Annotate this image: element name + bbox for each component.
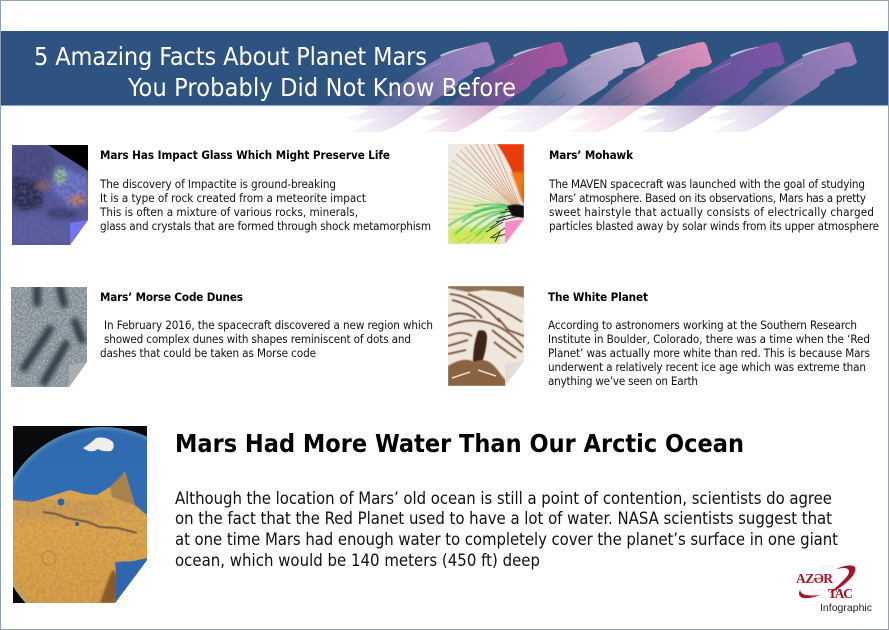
body text: particles blasted away by solar winds from its upper atmosphere xyxy=(549,219,879,233)
heading: The White Planet xyxy=(548,290,648,304)
body text: Institute in Boulder, Colorado, there was a time when the ‘Red xyxy=(548,332,870,346)
body text: glass and crystals that are formed through shock metamorphism xyxy=(100,219,431,233)
heading: Mars Has Impact Glass Which Might Preserve Life xyxy=(100,148,390,162)
body text xyxy=(548,177,879,233)
panel: white planet xyxy=(448,286,870,388)
fold corner xyxy=(505,219,524,244)
fold corner xyxy=(69,362,87,387)
image: Mars with ocean xyxy=(13,426,147,603)
image: impact glass rock xyxy=(12,144,88,245)
fold corner xyxy=(70,220,88,245)
logo wordmark xyxy=(796,571,853,601)
body text: showed complex dunes with shapes reminiscent of dots and xyxy=(104,332,411,346)
body text: Mars’ atmosphere. Based on its observations, Mars has a pretty xyxy=(549,191,866,205)
body text: underwent a relatively recent ice age which was extreme than xyxy=(548,360,866,374)
body text xyxy=(100,318,433,360)
fold corner xyxy=(505,361,524,386)
logo: AZERTAC Infographic xyxy=(796,565,872,614)
body text: According to astronomers working at the Southern Research xyxy=(548,318,857,332)
logo caption: Infographic xyxy=(820,602,872,614)
image: dunes xyxy=(11,287,87,387)
image: polar ice xyxy=(448,286,524,386)
decorative brush strokes xyxy=(347,42,857,132)
body text: It is a type of rock created from a meteorite impact xyxy=(100,191,366,205)
heading: Mars Had More Water Than Our Arctic Ocean xyxy=(175,429,744,458)
body text: anything we’ve seen on Earth xyxy=(548,374,698,388)
body text xyxy=(548,318,870,388)
panel: water on Mars xyxy=(13,426,838,603)
body text: on the fact that the Red Planet used to have a lot of water. NASA scientists suggest that xyxy=(175,509,832,528)
body text xyxy=(175,489,838,570)
heading: Mars’ Morse Code Dunes xyxy=(100,290,243,304)
panel: mohawk xyxy=(448,144,879,244)
body text: In February 2016, the spacecraft discovered a new region which xyxy=(104,318,433,332)
logo globe lines xyxy=(810,566,842,598)
header banner xyxy=(1,31,888,132)
logo swoosh xyxy=(799,565,855,598)
body text xyxy=(99,177,431,233)
body text: The discovery of Impactite is ground-breaking xyxy=(99,177,336,191)
body text: Planet’ was actually more white than red. This is because Mars xyxy=(548,346,870,360)
body text: sweet hairstyle that actually consists of electrically charged xyxy=(549,205,874,219)
banner title xyxy=(34,42,516,102)
banner title: 5 Amazing Facts About Planet Mars xyxy=(34,42,427,71)
logo wordmark: TAC xyxy=(828,586,853,601)
fold corner xyxy=(115,560,147,603)
banner title: You Probably Did Not Know Before xyxy=(127,73,516,102)
panel: morse code dunes xyxy=(11,287,433,387)
body text: dashes that could be taken as Morse code xyxy=(100,346,316,360)
body text: ocean, which would be 140 meters (450 ft) deep xyxy=(175,551,540,570)
panel: impact glass xyxy=(12,144,431,245)
image: mohawk particle plot xyxy=(448,144,524,244)
logo wordmark: AZƏR xyxy=(796,571,833,586)
body text: Although the location of Mars’ old ocean is still a point of contention, scientists do agree xyxy=(175,489,832,508)
body text: This is often a mixture of various rocks, minerals, xyxy=(99,205,358,219)
body text: The MAVEN spacecraft was launched with the goal of studying xyxy=(548,177,865,191)
heading: Mars’ Mohawk xyxy=(549,148,634,162)
body text: at one time Mars had enough water to completely cover the planet’s surface in one giant xyxy=(175,530,838,549)
